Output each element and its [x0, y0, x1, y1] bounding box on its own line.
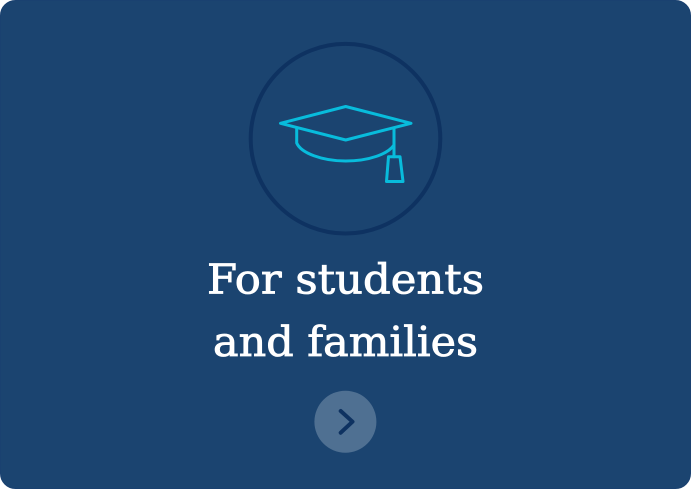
heading [207, 256, 484, 366]
icon: graduation cap in circle [251, 44, 440, 234]
heading: For students [207, 256, 484, 304]
heading: and families [213, 318, 478, 366]
icon: arrow button [314, 391, 376, 453]
